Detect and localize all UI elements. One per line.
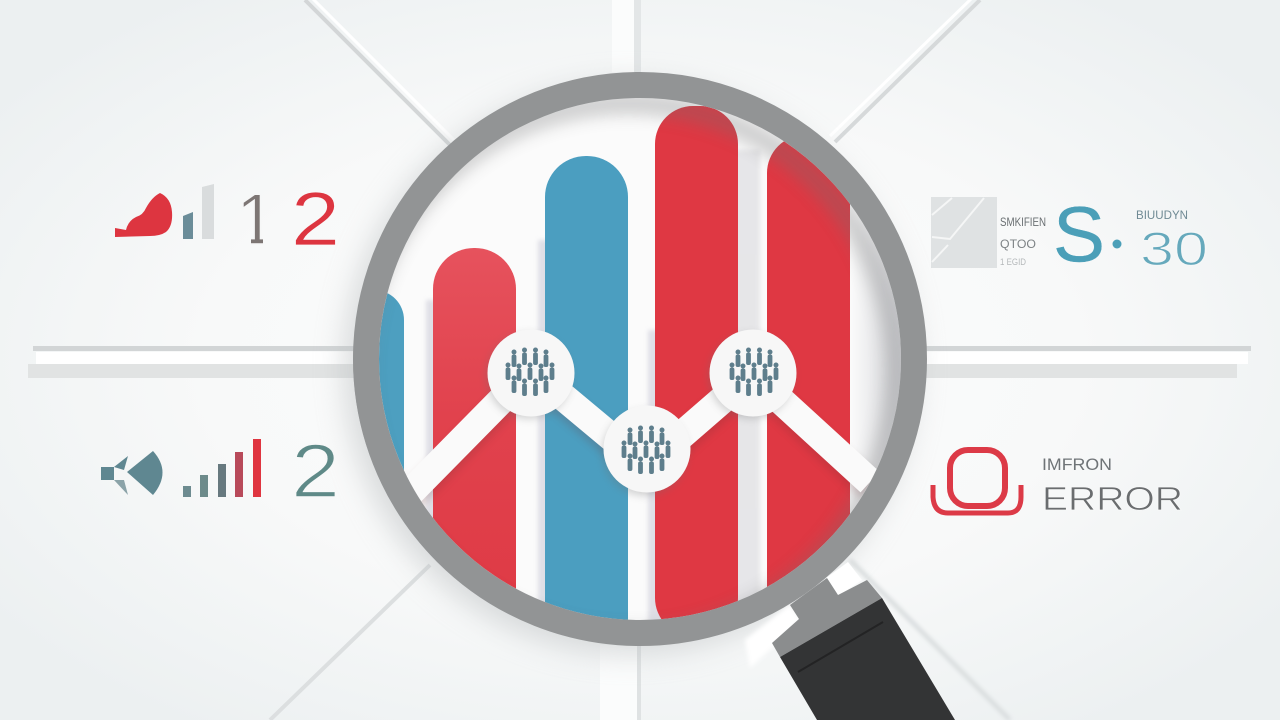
node: middle: [604, 406, 690, 492]
error label: ERROR: [1042, 480, 1183, 517]
top-left stat: cloud, bars and numbers: [115, 184, 336, 245]
icon: megaphone: [101, 451, 162, 495]
chart: rising signal bars: [183, 439, 261, 497]
top-right stat: map, S value and time: [931, 190, 1208, 278]
bar: red: [433, 248, 516, 588]
small caption: 1 EGID: [1000, 257, 1026, 267]
trend line shadow: [414, 409, 870, 507]
magnifier drop shadow: [343, 81, 917, 655]
handle crease: [798, 622, 883, 672]
handle grip: [780, 598, 955, 720]
bar shadows: [426, 150, 760, 660]
node: left: [488, 330, 574, 416]
node shadows: [486, 333, 794, 496]
lens background: [388, 98, 784, 620]
data nodes with people: [486, 330, 796, 496]
number two: 2: [291, 177, 340, 262]
bar: tallest red: [655, 106, 738, 636]
icon: red ring in cradle: [933, 450, 1021, 513]
icon: small bars: [183, 184, 214, 239]
magnifier ring: [353, 85, 914, 633]
magnifier lens contents: [379, 101, 901, 620]
ring body: [366, 85, 914, 633]
small caption: SMKIFIEN: [1000, 215, 1046, 229]
small caption: QTOO: [1000, 237, 1036, 251]
small caption: IMFRON: [1042, 455, 1112, 474]
handle white socket: [745, 562, 862, 668]
number two: 2: [291, 429, 340, 514]
teal dot: [1112, 240, 1122, 248]
right horizontal band: [925, 346, 1251, 378]
big teal letter: S: [1053, 190, 1105, 278]
teal number: 30: [1140, 222, 1208, 275]
lens inner shadow: [360, 103, 896, 639]
bar: tall blue: [545, 156, 628, 620]
magnifier handle: [745, 562, 955, 720]
handle metal neck: [772, 578, 882, 657]
bar chart: [379, 106, 850, 620]
background diagonal and vertical rays: [270, 0, 1010, 720]
icon: map tile: [931, 197, 997, 268]
bar: right red: [767, 141, 850, 587]
trend line: [407, 386, 876, 502]
bar: left blue: [379, 293, 404, 470]
bottom-right stat: error icon and label: [933, 450, 1183, 517]
node: right: [710, 330, 796, 416]
lens right side shading: [861, 228, 901, 485]
bottom-left stat: megaphone, bars and number: [101, 429, 340, 514]
small caption: BIUUDYN: [1136, 208, 1188, 222]
icon: red cloud: [115, 193, 172, 237]
ring outer crescent: [353, 300, 480, 597]
left horizontal band: [28, 346, 358, 378]
number one: 1: [236, 180, 276, 260]
